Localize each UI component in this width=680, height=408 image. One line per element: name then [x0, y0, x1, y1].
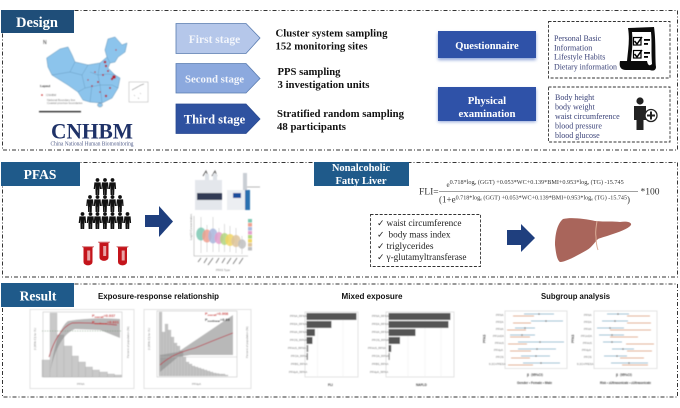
- indicators checklist: ✓: [377, 230, 385, 240]
- heading: subgroup analysis: Subgroup analysis: [541, 292, 610, 301]
- chart: mixed exposure FLI: PFNA_RFNA: [290, 314, 307, 318]
- physical examination list box: blood pressure: [555, 122, 602, 130]
- indicators checklist: waist circumference: [386, 218, 462, 228]
- icon: population pyramid: [79, 178, 131, 229]
- panel: PFAS and liver: [1, 162, 678, 277]
- chart: exposure-response curve 2: nonlinear: [208, 319, 221, 323]
- stage 3 arrow: Third stage: [184, 112, 246, 126]
- chart: subgroup by risk: Risk • ≥Ultrasonicate • ≤Ultrasonicate: [600, 381, 651, 385]
- chart: mixed exposure NAFLD: PFOA_RFNA: [372, 354, 389, 358]
- chart: exposure-response curve 1: β (95% CI) for FLI: [33, 327, 37, 350]
- chart: exposure-response curve 1: P: [92, 314, 95, 318]
- chart: subgroup by risk: β（95%CI）: [616, 372, 634, 377]
- questionnaire list box: [548, 22, 670, 78]
- FLI formula: e: [480, 196, 482, 202]
- chart: subgroup by gender: PFDA: [496, 320, 504, 324]
- chart: mixed exposure FLI: PFOA_RFNA: [291, 354, 308, 358]
- stage 2 arrow: Second stage: [185, 74, 244, 86]
- physical examination button: [438, 87, 536, 122]
- heading: exposure-response relationship: Exposure-response relationship: [98, 292, 219, 301]
- chart: exposure-response curve 1: Percent of population (%): [126, 326, 130, 358]
- chart: mixed exposure FLI: PFDA_RFNA: [290, 322, 307, 326]
- map of China with monitoring sites: Legend: [40, 84, 50, 88]
- arrow: PFAS to measurement: [145, 206, 173, 237]
- chart: mixed exposure FLI: PFOS_RFNA: [290, 338, 307, 342]
- FLI formula: e: [446, 181, 450, 189]
- icon: liver: [555, 218, 631, 262]
- map of China with monitoring sites: CNHBM: [46, 93, 57, 97]
- chart: exposure-response curve 2: =0.008: [217, 312, 228, 316]
- indicators checklist: [370, 214, 480, 266]
- chart: mixed exposure NAFLD: PFDA_RFNA: [372, 322, 389, 326]
- chart: subgroup by risk: PFUnDA: [581, 334, 592, 338]
- indicators checklist: ✓: [377, 218, 385, 228]
- chart: subgroup by risk: PFNA: [584, 313, 592, 317]
- questionnaire button: Questionnaire: [455, 41, 519, 52]
- indicators checklist: ✓: [377, 252, 385, 262]
- stage 1 arrow: First stage: [189, 34, 240, 46]
- stage 1 text: Cluster system sampling: [276, 28, 388, 40]
- chart: subgroup by risk: PFOS: [584, 355, 592, 359]
- map of China with monitoring sites: N: [43, 40, 47, 46]
- stage 2 text: 3 investigation units: [278, 80, 370, 91]
- stage 2 text: PPS sampling: [278, 67, 341, 78]
- chart: exposure-response curve 2: P: [205, 312, 208, 316]
- heading: nonalcoholic fatty liver: Fatty Liver: [335, 176, 387, 187]
- heading: nonalcoholic fatty liver: Nonalcoholic: [332, 163, 391, 174]
- stage 3 text: Stratified random sampling: [277, 109, 405, 120]
- chart: mixed exposure NAFLD: PFOS_RFNA: [372, 338, 389, 342]
- chart: mixed exposure NAFLD: NAFLD: [416, 383, 427, 387]
- physical examination list box: [548, 87, 670, 142]
- map of China with monitoring sites: [39, 37, 148, 112]
- FLI formula: 0.718*log: [450, 179, 624, 186]
- chart: exposure-response curve 1: =0.037: [104, 314, 115, 318]
- chart: subgroup by risk: PFHpA: [582, 348, 591, 352]
- chart: mixed exposure FLI: PFHpA_RFNA: [289, 370, 307, 374]
- chart: exposure-response curve 2: overall: [208, 313, 217, 317]
- FLI formula: FLI=: [419, 188, 439, 198]
- heading: result: [1, 283, 74, 307]
- chart: subgroup by gender: PFHA: [496, 327, 504, 331]
- physical examination list box: Body height: [555, 93, 595, 102]
- stage 2 arrow: [176, 64, 260, 93]
- chart: exposure-response curve 2: =0.69: [220, 318, 230, 322]
- chart: subgroup by gender: PFHpA: [494, 348, 503, 352]
- chart: subgroup by gender: Gender • Female • Male: [517, 381, 552, 385]
- chart: subgroup by risk: PFHxS: [583, 341, 592, 345]
- heading: nonalcoholic fatty liver: [314, 162, 409, 187]
- panel: design: [1, 10, 678, 150]
- FLI formula: (GGT) +0.053*WC+0.139*BMI+0.953*log: [482, 194, 591, 202]
- questionnaire button: [438, 31, 536, 60]
- chart: exposure-response curve 1: overall: [95, 315, 104, 319]
- violin chart of PFAS concentration: Log10 Concentration: [189, 214, 193, 240]
- chart: exposure-response curve 2: P: [205, 318, 208, 322]
- icon: blood sample tubes: [82, 242, 128, 265]
- chart: mixed exposure NAFLD: PFHpA_RFNA: [370, 370, 388, 374]
- questionnaire list box: Information: [554, 44, 592, 52]
- chart: subgroup by gender: [482, 311, 567, 385]
- heading: design: Design: [16, 15, 58, 31]
- arrow: indicators to liver: [507, 224, 535, 252]
- chart: exposure-response curve 2: PFHpA: [192, 382, 201, 386]
- heading: design: [1, 10, 74, 33]
- questionnaire list box: Personal Basic: [554, 34, 602, 43]
- FLI formula: e: [591, 196, 593, 202]
- physical examination button: examination: [459, 108, 515, 120]
- stage 1 arrow: [176, 24, 260, 54]
- chart: mixed exposure FLI: [288, 312, 358, 387]
- FLI formula: e: [475, 181, 477, 186]
- chart: subgroup by gender: PFOS: [496, 355, 504, 359]
- chart: subgroup by gender: 6:2Cl-PFESA: [489, 362, 506, 366]
- stage 2 text: [278, 67, 370, 91]
- CNHBM logo: China National Human Biomonitoring: [50, 142, 134, 148]
- instruments: [195, 171, 260, 210]
- heading: PFAS: [1, 162, 80, 186]
- chart: mixed exposure NAFLD: PFHA_RFNA: [372, 330, 389, 334]
- stage 1 text: [276, 28, 388, 52]
- chart: subgroup by risk: PFAS: [571, 335, 575, 343]
- FLI formula: (1+e: [439, 194, 456, 204]
- panel: result: [1, 283, 678, 397]
- chart: exposure-response curve 1: nonlinear: [95, 321, 108, 325]
- chart: exposure-response curve 1: PFNA: [77, 382, 85, 386]
- chart: mixed exposure FLI: PFHA_RFNA: [290, 330, 307, 334]
- physical examination list box: waist circumference: [555, 112, 620, 121]
- questionnaire list box: Lifestyle Habits: [554, 52, 605, 62]
- heading: mixed exposure: Mixed exposure: [342, 292, 403, 301]
- physical examination button: Physical: [468, 95, 506, 107]
- chart: exposure-response curve 1: [30, 310, 134, 388]
- chart: mixed exposure FLI: PFHxS_RFNA: [288, 346, 306, 350]
- violin chart of PFAS concentration: PFAS Type: [216, 268, 230, 272]
- chart: mixed exposure FLI: FLI: [328, 383, 333, 387]
- chart: subgroup by gender: PFNA: [496, 313, 504, 317]
- icon: person with plus: [634, 97, 657, 130]
- FLI formula: *100: [640, 188, 660, 198]
- stage 3 arrow: [176, 104, 260, 134]
- chart: mixed exposure NAFLD: PFHxS_RFNA: [368, 346, 386, 350]
- FLI formula: e: [587, 181, 589, 186]
- questionnaire list box: Dietary information: [554, 62, 617, 72]
- chart: subgroup by risk: 6:2Cl-PFESA: [577, 362, 594, 366]
- indicators checklist: triglycerides: [386, 241, 434, 251]
- heading: PFAS: PFAS: [24, 167, 56, 182]
- FLI formula: (TG) -15.745: [593, 194, 627, 202]
- FLI formula: 0.718*log: [456, 194, 627, 202]
- chart: exposure-response curve 2: Percent of population (%): [245, 326, 249, 358]
- chart: mixed exposure NAFLD: [368, 312, 454, 387]
- chart: subgroup by risk: PFHA: [584, 327, 592, 331]
- chart: subgroup by gender: PFAS: [482, 335, 486, 343]
- chart: mixed exposure NAFLD: PFNA_RFNA: [372, 314, 389, 318]
- map of China with monitoring sites: National Boundary line: [47, 98, 76, 102]
- FLI formula: [419, 179, 660, 204]
- chart: subgroup by risk: PFDA: [584, 320, 592, 324]
- violin chart of PFAS concentration: [189, 214, 252, 272]
- chart: mixed exposure NAFLD: PFBS_RFNA: [372, 362, 389, 366]
- physical examination list box: blood glucose: [555, 131, 600, 140]
- chart: mixed exposure FLI: PFBS_RFNA: [291, 362, 308, 366]
- chart: exposure-response curve 1: =0.031: [107, 320, 119, 324]
- FLI formula: (TG) -15.745: [589, 179, 624, 186]
- chart: subgroup by gender: PFUnDA: [493, 334, 504, 338]
- FLI formula: ): [627, 194, 630, 204]
- indicators checklist: body mass index: [388, 230, 451, 240]
- stage 3 text: [277, 109, 405, 133]
- indicators checklist: γ-glutamyltransferase: [385, 252, 466, 262]
- chart: subgroup by gender: PFHxS: [495, 341, 504, 345]
- chart: subgroup by gender: β（95%CI）: [527, 372, 545, 377]
- CNHBM logo: CNHBM: [51, 118, 133, 144]
- chart: exposure-response curve 2: β (95% CI) for FLI: [147, 327, 151, 350]
- map of China with monitoring sites: Coastal province boundaries: [47, 101, 83, 105]
- stage 1 text: 152 monitoring sites: [276, 42, 368, 52]
- physical examination list box: body weight: [555, 102, 596, 112]
- stage 3 text: 48 participants: [277, 122, 346, 133]
- indicators checklist: ✓: [377, 241, 385, 251]
- heading: result: Result: [20, 288, 57, 304]
- icon: checklist document: [620, 27, 656, 71]
- chart: exposure-response curve 1: P: [92, 320, 95, 324]
- FLI formula: (GGT) +0.053*WC+0.139*BMI+0.953*log: [476, 179, 587, 186]
- chart: exposure-response curve 2: [144, 310, 251, 388]
- chart: subgroup by risk: [571, 311, 657, 385]
